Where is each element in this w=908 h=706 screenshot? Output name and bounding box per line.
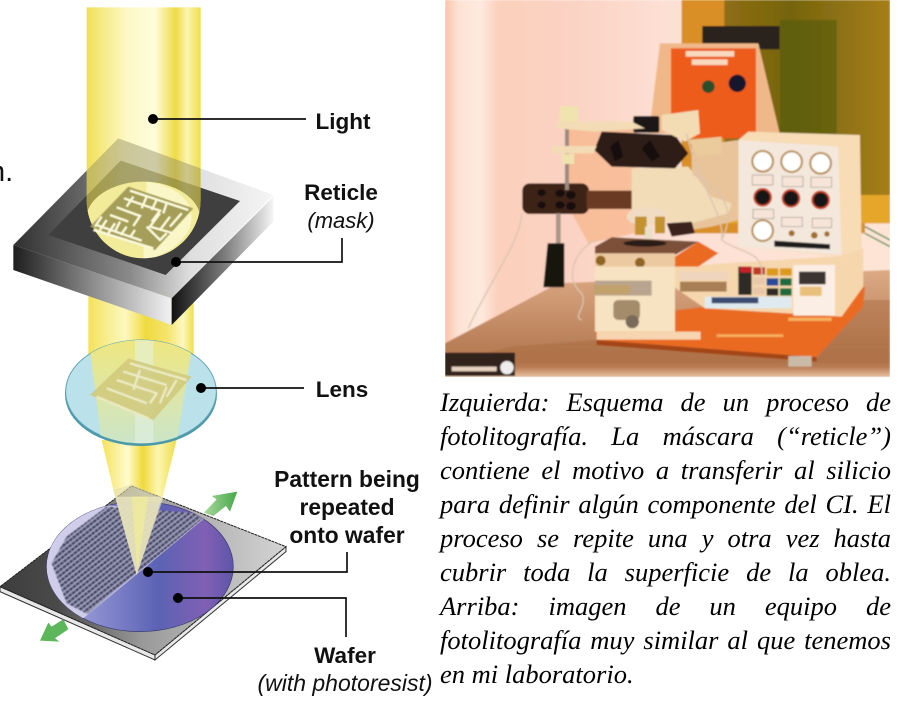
caption text: contiene el motivo a transferir al silicio bbox=[440, 455, 891, 485]
lower light beam bbox=[88, 293, 194, 367]
label: Pattern being repeated onto wafer bbox=[274, 466, 420, 548]
support post and arms bbox=[543, 106, 645, 287]
table bbox=[445, 270, 890, 377]
caption text: para definir algún componente del CI. El bbox=[440, 489, 891, 519]
lamp barrel bbox=[522, 183, 632, 214]
pressure control box bbox=[738, 132, 862, 256]
caption text: cubrir toda la superficie de la oblea. bbox=[440, 557, 891, 587]
label: Pattern being repeated onto wafer: repeated bbox=[299, 494, 395, 520]
label: Wafer (with photoresist) bbox=[257, 643, 433, 696]
wafer stage bbox=[0, 486, 286, 660]
label: Reticle (mask) bbox=[304, 180, 378, 233]
caption text: Arriba: imagen de un equipo de bbox=[440, 591, 891, 621]
reticle mask bbox=[13, 138, 273, 325]
label: Pattern being repeated onto wafer: onto wafer bbox=[289, 522, 405, 548]
caption text: Izquierda: Esquema de un proceso de bbox=[440, 387, 891, 417]
label: Reticle (mask): Reticle bbox=[304, 180, 378, 205]
diagram: photolithography schematic bbox=[0, 7, 433, 696]
light cone bbox=[102, 440, 177, 497]
label: Pattern being repeated onto wafer: Pattern being bbox=[274, 466, 420, 492]
table sticker bbox=[445, 353, 515, 376]
stage bbox=[593, 237, 718, 332]
wall bbox=[445, 0, 866, 344]
leader dots bbox=[143, 114, 206, 603]
caption text: en mi laboratorio. bbox=[440, 659, 634, 689]
cables bbox=[468, 133, 890, 328]
orange base plate bbox=[595, 287, 865, 357]
lower control unit bbox=[673, 248, 863, 317]
microscope bbox=[594, 110, 738, 240]
lens bbox=[65, 337, 217, 446]
caption text: proceso se repite una y otra vez hasta bbox=[440, 523, 891, 553]
caption text: fotolitografía muy similar al que tenemos bbox=[440, 625, 891, 655]
caption text: fotolitografía. La máscara (“reticle”) bbox=[440, 421, 891, 451]
label: Light: Light bbox=[316, 109, 371, 134]
reticle circuit pattern bbox=[90, 187, 193, 250]
light beam bbox=[86, 7, 201, 258]
photo: photolithography equipment bbox=[445, 0, 890, 377]
wafer with photoresist bbox=[46, 503, 234, 632]
wall shadow glow bbox=[568, 128, 635, 243]
lamp housing bbox=[649, 26, 780, 138]
label: Lens: Lens bbox=[316, 377, 368, 402]
green direction arrows bbox=[40, 492, 237, 642]
label: Wafer (with photoresist): (with photoresist) bbox=[257, 670, 433, 696]
label: Reticle (mask): (mask) bbox=[307, 208, 375, 233]
leader lines bbox=[148, 119, 347, 637]
window bbox=[680, 0, 890, 234]
label: Wafer (with photoresist): Wafer bbox=[314, 643, 376, 668]
caption text bbox=[438, 387, 891, 689]
focused light on wafer bbox=[113, 484, 163, 575]
